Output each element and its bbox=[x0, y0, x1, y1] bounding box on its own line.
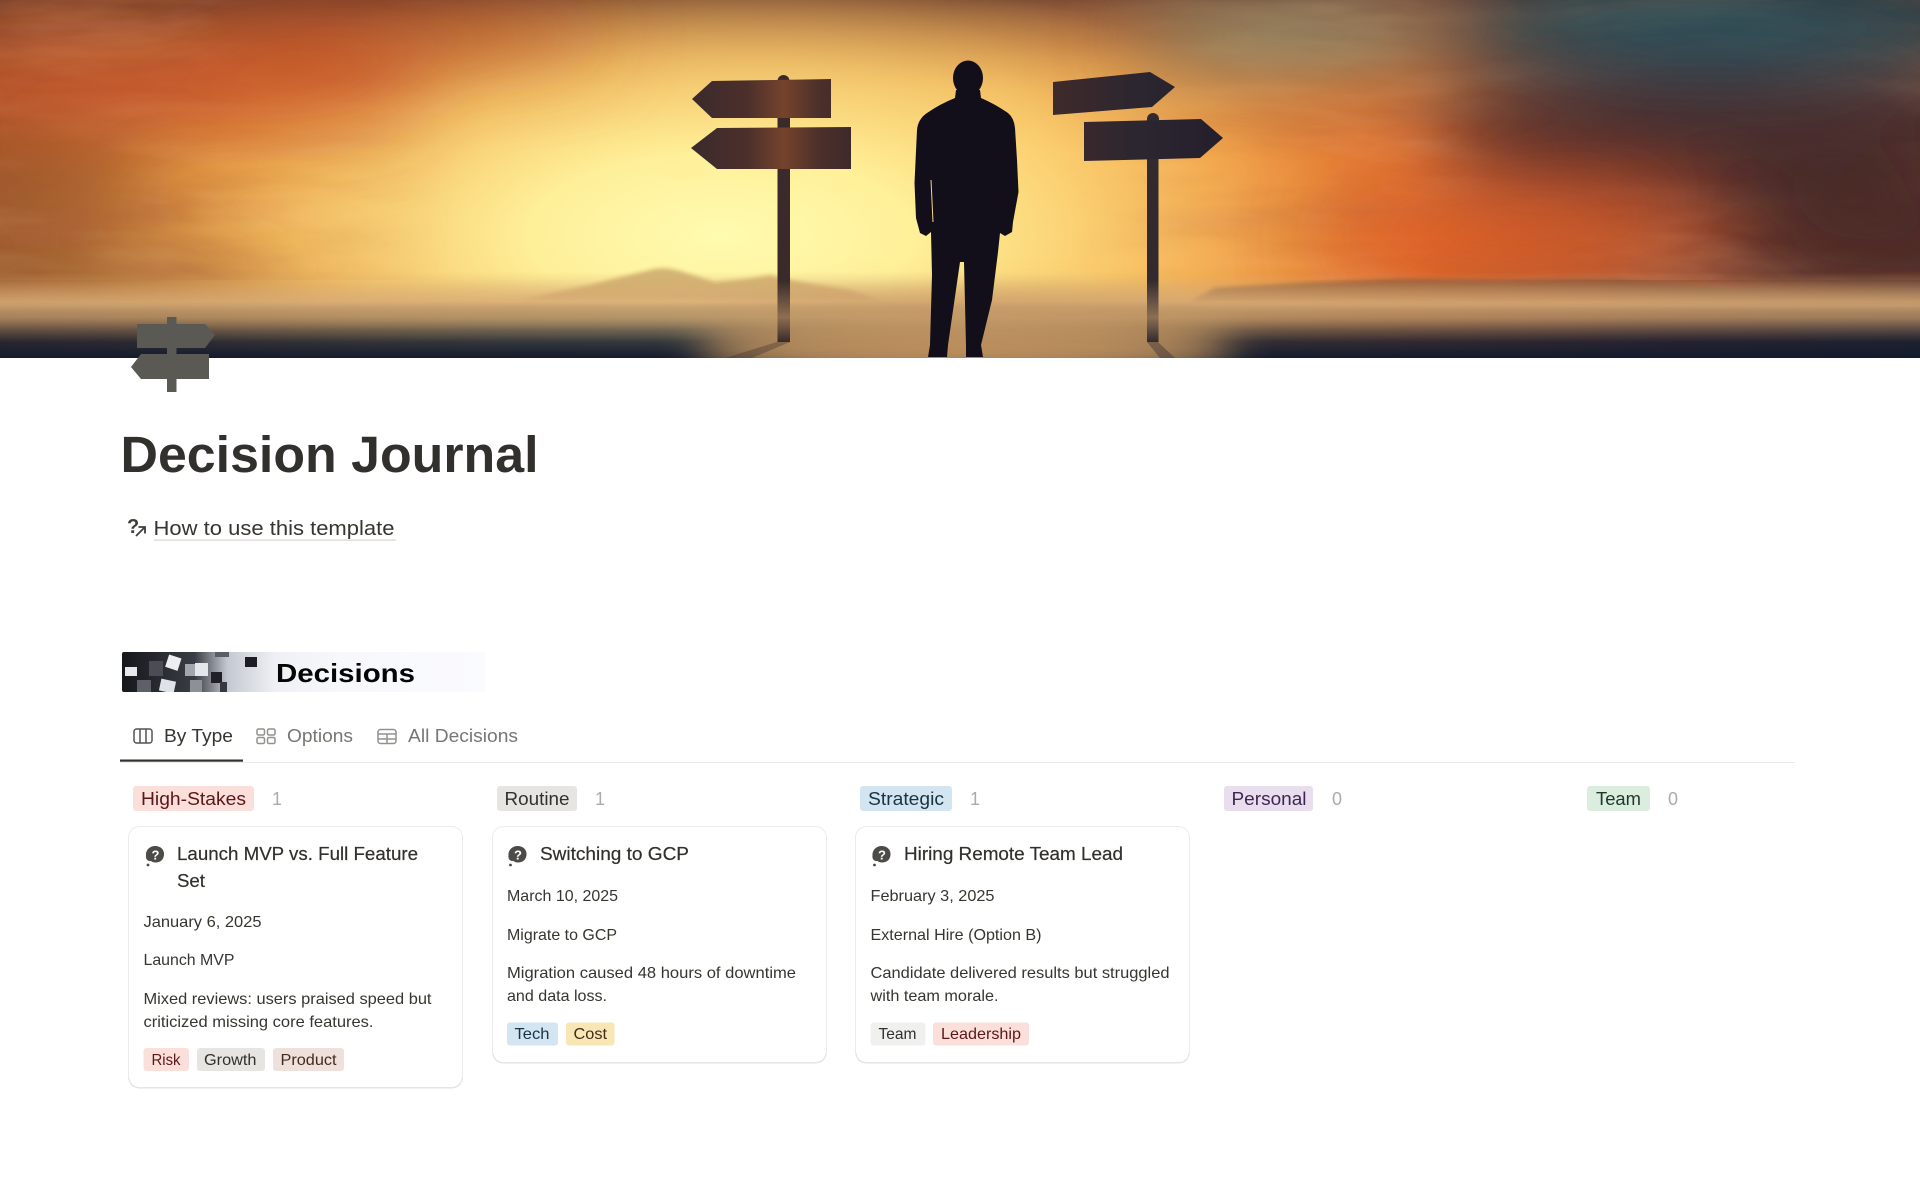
view tabs bbox=[120, 726, 518, 762]
card: Launch MVP vs. Full Feature Set: Set bbox=[177, 871, 205, 891]
column header: Team bbox=[1587, 786, 1678, 811]
link: how to use this template: ? bbox=[127, 516, 139, 538]
card: Hiring Remote Team Lead: Hiring Remote Team Lead bbox=[904, 844, 1123, 864]
column header: High-Stakes bbox=[133, 786, 282, 811]
right signpost bbox=[1053, 72, 1223, 358]
icon: question bubble bbox=[872, 846, 891, 866]
sky clouds bbox=[0, 0, 1920, 280]
column header: Routine: Routine bbox=[504, 789, 570, 809]
column header: High-Stakes: 1 bbox=[272, 789, 282, 809]
active tab underline bbox=[120, 760, 243, 762]
icon: gallery view bbox=[257, 729, 275, 744]
icon: question bubble: ? bbox=[152, 848, 160, 862]
tags: Risk bbox=[152, 1052, 181, 1069]
tab: Options: Options bbox=[287, 726, 353, 746]
card: Launch MVP vs. Full Feature Set bbox=[128, 826, 462, 1088]
icon: question bubble: ? bbox=[514, 848, 522, 862]
card: Switching to GCP: Migrate to GCP bbox=[507, 927, 617, 944]
column header: Strategic bbox=[860, 786, 980, 811]
road bbox=[695, 307, 1235, 383]
card: Launch MVP vs. Full Feature Set: January 6, 2025 bbox=[144, 914, 262, 931]
tags bbox=[144, 1048, 344, 1071]
card: Switching to GCP: March 10, 2025 bbox=[507, 888, 618, 905]
card: Switching to GCP: Migration caused 48 hours of downtime bbox=[507, 965, 796, 982]
tab: All Decisions: All Decisions bbox=[408, 726, 518, 746]
link: how to use this template: How to use this template bbox=[154, 518, 394, 540]
man silhouette bbox=[914, 60, 1018, 357]
section banner: Decisions: Decisions bbox=[276, 658, 415, 688]
card: Hiring Remote Team Lead: with team morale. bbox=[869, 988, 998, 1005]
card: Hiring Remote Team Lead: Candidate delivered results but struggled bbox=[870, 965, 1170, 982]
column header: Routine bbox=[497, 786, 605, 811]
tags bbox=[507, 1022, 614, 1046]
column header: Team: 0 bbox=[1668, 789, 1678, 809]
section banner: Decisions bbox=[122, 652, 485, 694]
column header: Strategic: 1 bbox=[970, 789, 980, 809]
tags: Growth bbox=[204, 1052, 256, 1069]
icon: table view bbox=[378, 730, 396, 744]
column header: Personal: Personal bbox=[1232, 789, 1306, 809]
column header: Personal bbox=[1224, 786, 1342, 811]
card: Launch MVP vs. Full Feature Set: Launch MVP bbox=[144, 952, 234, 969]
column header: Personal: 0 bbox=[1332, 789, 1342, 809]
column header: Team: Team bbox=[1596, 789, 1641, 809]
icon: question bubble bbox=[146, 846, 164, 866]
icon: question bubble: ? bbox=[878, 848, 886, 862]
card: Switching to GCP bbox=[492, 826, 826, 1063]
title: Decision Journal bbox=[120, 426, 538, 483]
icon: board view bbox=[134, 729, 152, 743]
card: Hiring Remote Team Lead: External Hire (Option B) bbox=[870, 927, 1042, 944]
cover banner: sunset scene bbox=[0, 0, 1920, 383]
left signpost bbox=[691, 75, 851, 358]
icon: question bubble bbox=[508, 846, 527, 866]
tags: Cost bbox=[574, 1026, 608, 1043]
column header: High-Stakes: High-Stakes bbox=[141, 789, 246, 809]
column header: Strategic: Strategic bbox=[868, 789, 944, 809]
card: Hiring Remote Team Lead bbox=[856, 826, 1190, 1063]
tags: Team bbox=[878, 1026, 916, 1043]
page icon: signpost bbox=[131, 317, 215, 392]
card: Launch MVP vs. Full Feature Set: criticized missing core features. bbox=[144, 1014, 374, 1031]
card: Hiring Remote Team Lead: February 3, 2025 bbox=[870, 888, 995, 905]
dark foreground bbox=[0, 302, 1920, 358]
tags: Leadership bbox=[941, 1026, 1021, 1043]
card: Switching to GCP: and data loss. bbox=[507, 988, 607, 1005]
card: Launch MVP vs. Full Feature Set: Launch MVP vs. Full Feature bbox=[177, 844, 418, 864]
card: Switching to GCP: Switching to GCP bbox=[540, 844, 689, 864]
tab: By Type: By Type bbox=[164, 726, 233, 746]
tags: Tech bbox=[514, 1026, 550, 1043]
ground haze bbox=[0, 274, 1920, 326]
tags bbox=[870, 1022, 1029, 1046]
tags: Product bbox=[280, 1052, 337, 1069]
card: Launch MVP vs. Full Feature Set: Mixed reviews: users praised speed but bbox=[144, 991, 432, 1008]
distant hills and tree line bbox=[538, 266, 1728, 302]
column header: Routine: 1 bbox=[595, 789, 605, 809]
thin haze over post bases bbox=[0, 280, 1920, 342]
